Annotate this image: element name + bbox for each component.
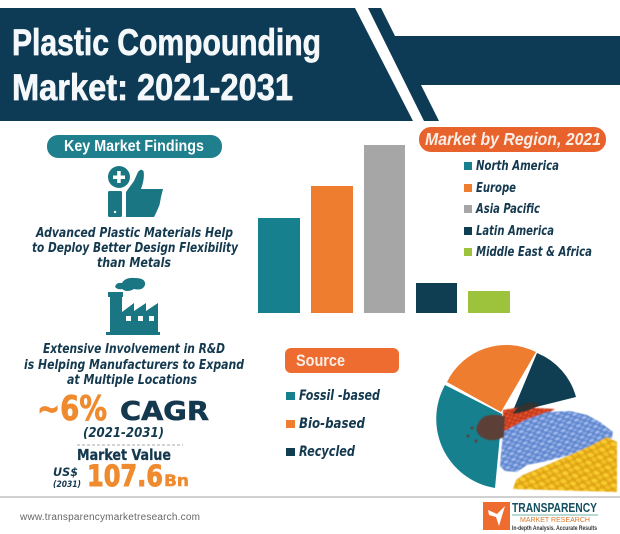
- legend: source: Fossil -based: [299, 388, 380, 404]
- heading: market by region: Market by Region, 2021: [425, 129, 601, 149]
- legend: regions: Latin America: [476, 223, 554, 239]
- title: [12, 22, 321, 108]
- title: Plastic Compounding: [12, 22, 321, 63]
- icon: thumbs up: [108, 166, 163, 217]
- market value callout: US$: [53, 465, 78, 479]
- legend: regions: [464, 158, 592, 260]
- bar chart: market by region: [258, 145, 510, 313]
- legend: source: Bio-based: [299, 416, 366, 432]
- logo: transparency market research: MARKET RESEARCH: [520, 515, 590, 524]
- header banner: [0, 8, 620, 121]
- text: finding one: [32, 225, 239, 271]
- text: finding two: Extensive Involvement in R&D: [43, 341, 225, 357]
- logo: transparency market research: In-depth Analysis. Accurate Results: [512, 525, 597, 532]
- text: finding one: Advanced Plastic Materials Help: [35, 225, 233, 241]
- market value callout: 107.6: [87, 459, 163, 493]
- CAGR callout: CAGR: [120, 397, 209, 427]
- CAGR callout: (2021-2031): [83, 425, 164, 441]
- panel: key market findings heading: Key Market Findings: [64, 138, 204, 155]
- legend: regions: Europe: [476, 180, 516, 196]
- market value callout: Market Value: [77, 446, 171, 464]
- title: Market: 2021-2031: [12, 67, 293, 108]
- legend: regions: North America: [476, 158, 559, 174]
- icon: factory: [106, 278, 160, 335]
- text: finding one: than Metals: [97, 255, 171, 271]
- CAGR callout: ~6%: [37, 389, 107, 429]
- text: finding one: to Deploy Better Design Flexibility: [32, 240, 239, 256]
- legend: source: Recycled: [299, 444, 355, 460]
- website url: www.transparencymarketresearch.com: [19, 512, 200, 523]
- text: finding two: is Helping Manufacturers to Expand: [24, 357, 244, 373]
- logo: transparency market research: TRANSPARENCY: [512, 500, 597, 515]
- legend: regions: Asia Pacific: [475, 201, 540, 217]
- legend: source: [286, 388, 380, 460]
- CAGR callout: [37, 389, 209, 441]
- market value callout: [53, 446, 189, 493]
- logo: transparency market research: [483, 500, 598, 532]
- panel: key market findings heading: [47, 135, 222, 158]
- heading: source: Source: [296, 352, 345, 370]
- heading: source: [285, 348, 399, 373]
- market value callout: (2031): [53, 480, 81, 490]
- text: finding two: at Multiple Locations: [67, 372, 197, 388]
- pie chart with plastic pellets: [436, 345, 617, 492]
- market value callout: Bn: [164, 471, 189, 490]
- text: finding two: [24, 341, 244, 388]
